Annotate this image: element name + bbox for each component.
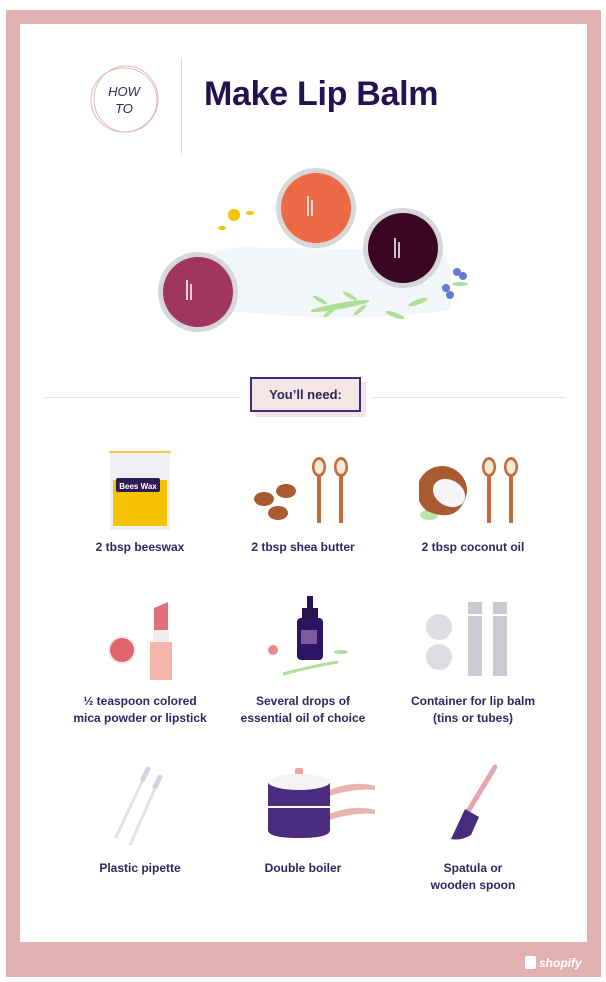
item: mica powder: ½ teaspoon colored (83, 694, 197, 708)
item: double boiler (265, 768, 375, 875)
item: shea butter: 2 tbsp shea butter (251, 540, 355, 554)
you'll need label: You’ll need: (269, 387, 342, 402)
you'll need label (250, 377, 366, 417)
item: spatula (430, 764, 515, 892)
item: mica powder: mica powder or lipstick (73, 711, 207, 725)
hero illustration: lip balm tins (158, 168, 468, 332)
item: essential oil: essential oil of choice (241, 711, 365, 725)
item: essential oil (241, 596, 365, 725)
item: beeswax: 2 tbsp beeswax (96, 540, 184, 554)
how-to badge: HOW (108, 84, 142, 99)
item: shea butter (251, 457, 355, 554)
shopify logo: shopify (539, 956, 582, 970)
item: container (411, 602, 535, 725)
item: coconut oil (419, 457, 524, 554)
item: coconut oil: 2 tbsp coconut oil (422, 540, 524, 554)
item: double boiler: Double boiler (265, 861, 341, 875)
item: pipette (99, 766, 181, 875)
item: beeswax: Bees Wax (119, 482, 157, 491)
item: essential oil: Several drops of (256, 694, 350, 708)
item: container: (tins or tubes) (433, 711, 513, 725)
how-to badge: TO (115, 101, 133, 116)
item: pipette: Plastic pipette (99, 861, 181, 875)
divider lines (44, 397, 240, 398)
item: container: Container for lip balm (411, 694, 535, 708)
item: beeswax (96, 450, 184, 554)
item: mica powder (73, 602, 207, 725)
item: spatula: Spatula or (444, 861, 502, 875)
item: spatula: wooden spoon (431, 878, 515, 892)
title: Make Lip Balm (204, 75, 438, 113)
how-to badge (90, 66, 158, 132)
